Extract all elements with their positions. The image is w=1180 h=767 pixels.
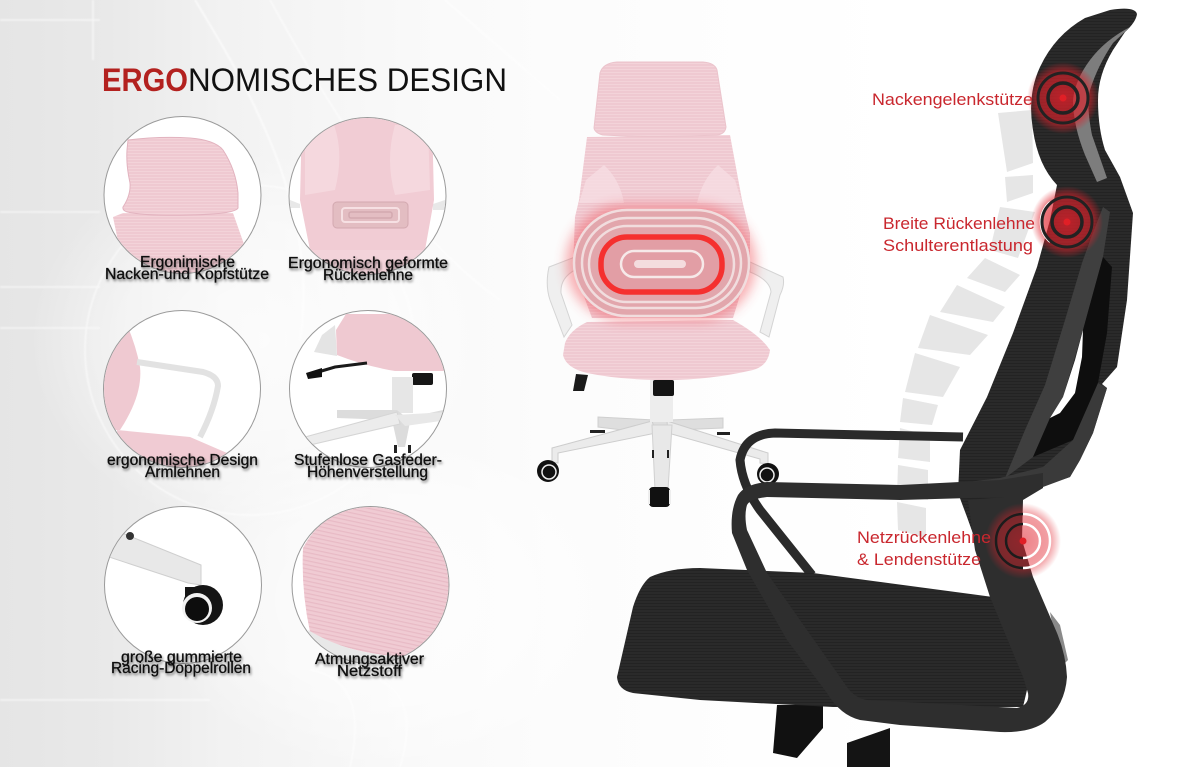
arm junction <box>960 383 1107 497</box>
caption: Rückenlehne <box>323 267 413 284</box>
back frame and headrest <box>958 9 1137 595</box>
seat knob <box>1050 612 1068 668</box>
caption: Ergonomisch geformte <box>288 255 448 272</box>
caption: Armlehnen <box>145 464 220 481</box>
detail photo: castor <box>109 532 223 625</box>
detail photo: backrest <box>290 115 445 275</box>
column base <box>847 728 890 767</box>
title: ERGO <box>102 62 188 98</box>
callout: shoulder relief: Schulterentlastung <box>883 236 1033 255</box>
callout: mesh back and lumbar support <box>857 503 1061 579</box>
caption: Atmungsaktiver <box>315 651 424 668</box>
seat <box>563 320 770 380</box>
backrest <box>573 135 750 318</box>
black office chair side view <box>617 9 1137 767</box>
column <box>773 705 823 758</box>
back slot <box>1033 257 1112 457</box>
callout: shoulder relief: Breite Rückenlehne <box>883 214 1035 233</box>
far armrest <box>740 433 963 575</box>
back opening <box>1050 330 1083 418</box>
feature: shaped backrest <box>288 115 448 284</box>
callout: mesh back and lumbar support: & Lendenstütze <box>857 550 981 569</box>
lumbar highlight <box>566 205 756 321</box>
target marker <box>985 503 1061 579</box>
caption: Ergonimische <box>140 254 235 271</box>
caption: Netzstoff <box>337 663 403 680</box>
feature: breathable mesh <box>292 500 455 680</box>
back side panel <box>1005 207 1110 478</box>
base and castors <box>537 374 779 507</box>
caption: Stufenlose Gasfeder- <box>294 452 442 469</box>
callout: mesh back and lumbar support: Netzrückenlehne <box>857 528 991 547</box>
feature: racing castors <box>104 506 262 677</box>
white office chair front view <box>537 62 784 507</box>
target marker <box>1031 186 1103 258</box>
near armrest and frame <box>732 473 1067 732</box>
title: NOMISCHES DESIGN <box>188 62 507 98</box>
headrest <box>594 62 726 136</box>
caption: Nacken-und Kopfstütze <box>105 266 269 283</box>
spine illustration <box>897 110 1035 538</box>
caption: Höhenverstellung <box>307 464 428 481</box>
detail photo: mesh fabric <box>302 507 448 663</box>
caption: ergonomische Design <box>107 452 258 469</box>
feature: neck and head rest <box>104 116 269 283</box>
caption: Racing-Doppelrollen <box>111 660 251 677</box>
headrest insert <box>1073 27 1130 182</box>
callout: neck support <box>872 62 1099 134</box>
caption: große gummierte <box>121 649 242 666</box>
feature: armrests <box>100 310 260 481</box>
detail photo: chair base <box>305 314 448 453</box>
detail photo: headrest <box>113 137 245 275</box>
target marker <box>1027 62 1099 134</box>
callout: shoulder relief <box>883 186 1103 258</box>
seat <box>617 568 1030 707</box>
callout: neck support: Nackengelenkstütze <box>872 90 1033 109</box>
white armrests <box>547 257 784 337</box>
detail photo: armrest <box>104 332 226 467</box>
feature: gas lift height adjustment <box>290 310 448 481</box>
